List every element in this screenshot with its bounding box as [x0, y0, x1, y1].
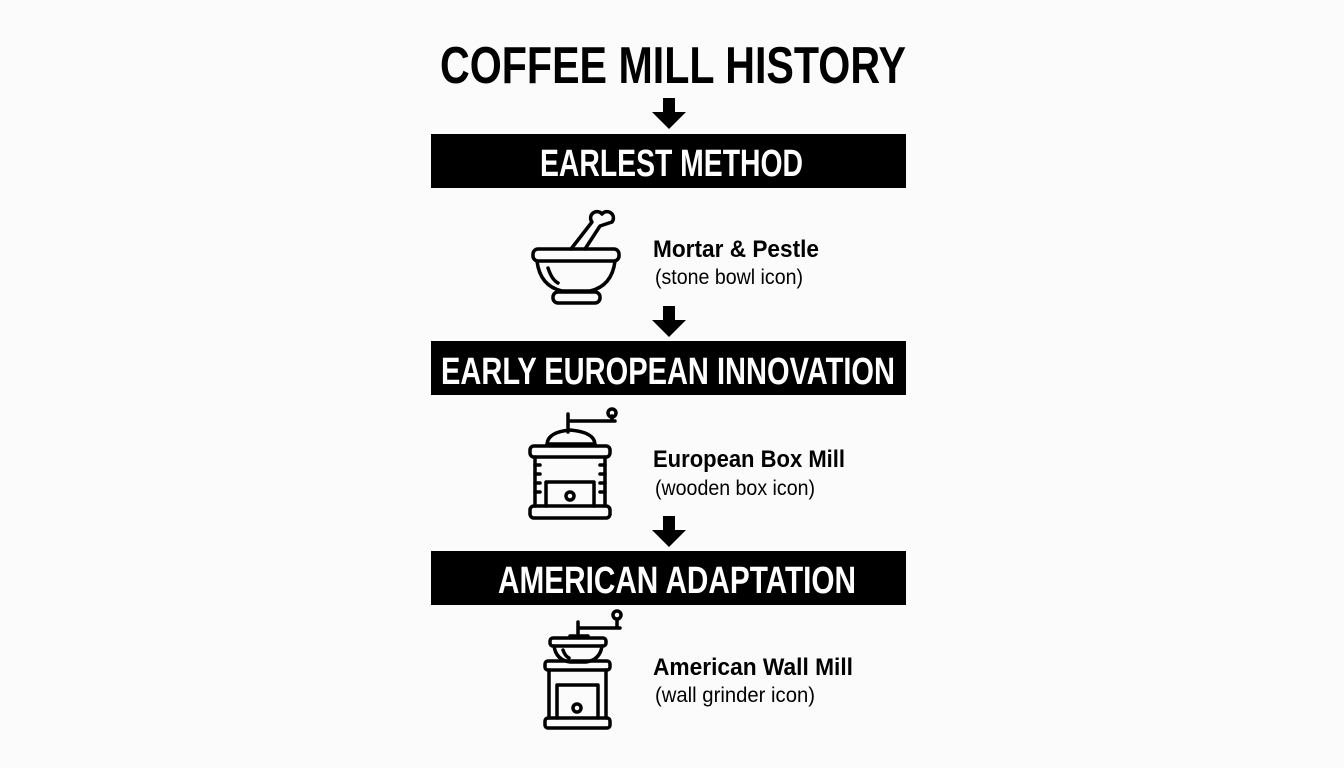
label: mortar & pestle: [653, 236, 819, 289]
bar: earliest method: EARLEST METHOD: [540, 143, 803, 185]
bar: early european innovation: [431, 341, 906, 395]
bar: earliest method: [431, 134, 906, 188]
arrow 3: [652, 516, 686, 547]
label: mortar & pestle: Mortar & Pestle: [653, 236, 819, 263]
label: american wall mill: (wall grinder icon): [655, 684, 815, 707]
bar: american adaptation: AMERICAN ADAPTATION: [498, 560, 856, 602]
bar: early european innovation: EARLY EUROPEAN INNOVATION: [441, 351, 895, 393]
arrow 1: [652, 98, 686, 129]
icon: european box mill: [530, 409, 616, 518]
label: mortar & pestle: (stone bowl icon): [655, 266, 803, 289]
icon: mortar and pestle: [533, 212, 619, 303]
icon: american wall mill: [545, 611, 621, 728]
title: COFFEE MILL HISTORY: [440, 37, 906, 95]
label: european box mill: [653, 446, 845, 500]
label: european box mill: European Box Mill: [653, 446, 845, 473]
label: american wall mill: [653, 654, 853, 707]
label: american wall mill: American Wall Mill: [653, 654, 853, 681]
bar: american adaptation: [431, 551, 906, 605]
arrow 2: [652, 306, 686, 337]
label: european box mill: (wooden box icon): [655, 477, 815, 500]
